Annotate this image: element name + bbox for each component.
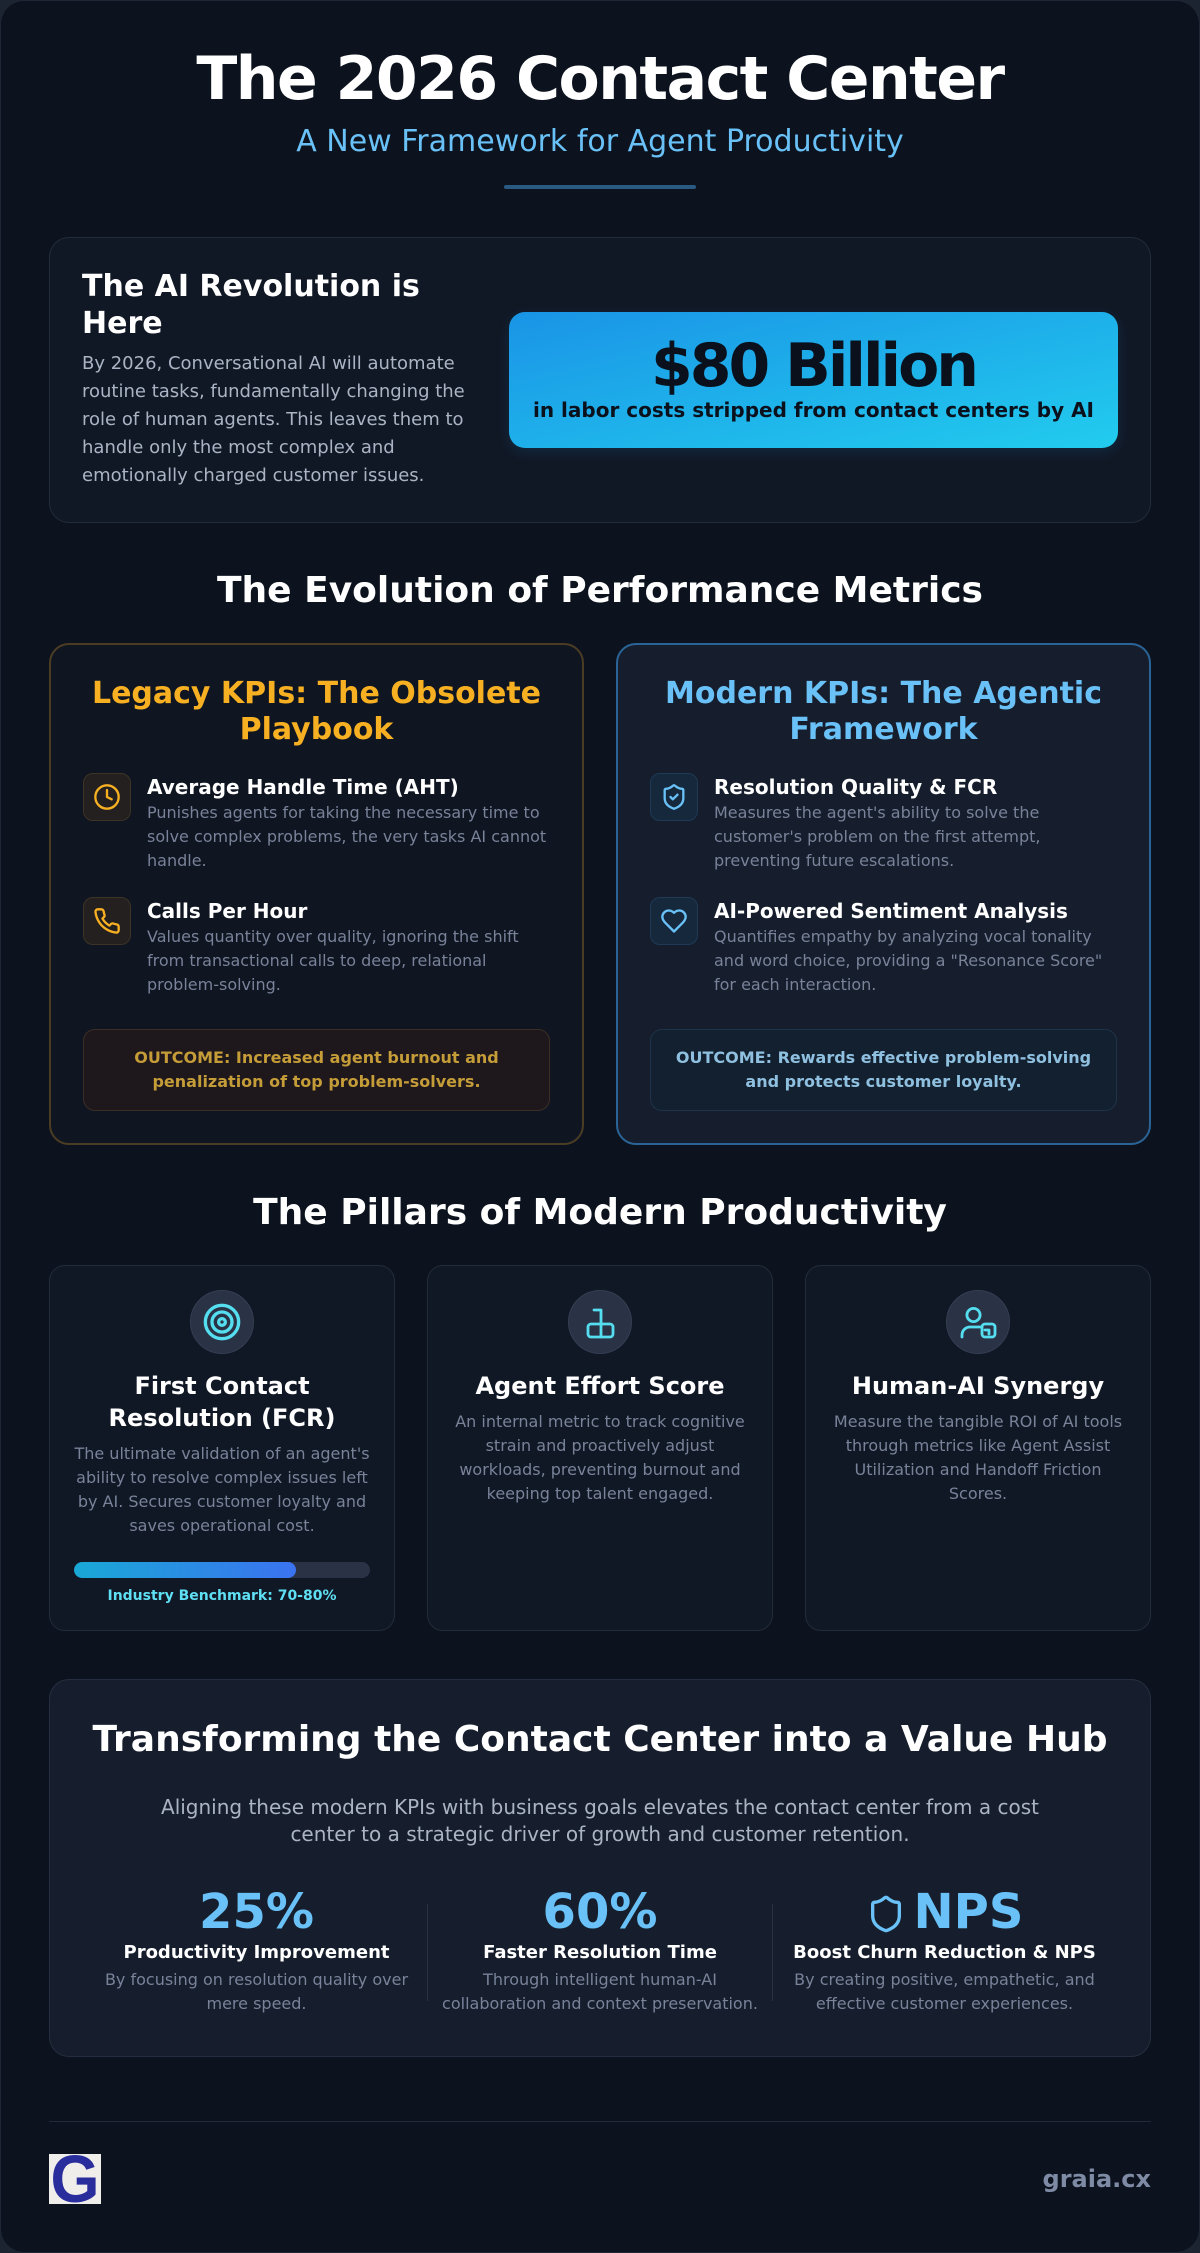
heading: modern KPIs: Modern KPIs: The Agentic bbox=[665, 676, 1102, 711]
panel: first contact resolution bbox=[49, 1265, 395, 1631]
item: sentiment analysis: Quantifies empathy by analyzing vocal tonality bbox=[714, 927, 1092, 946]
heading: legacy KPIs bbox=[92, 676, 541, 747]
heading: AI revolution: Here bbox=[82, 306, 163, 341]
panel: value hub bbox=[49, 1679, 1151, 2057]
panel: human AI synergy bbox=[805, 1265, 1151, 1631]
icon: target bbox=[190, 1290, 254, 1354]
item: resolution quality: preventing future escalations. bbox=[714, 851, 954, 870]
icon: shield bbox=[871, 1896, 901, 1932]
item: average handle time bbox=[147, 775, 546, 870]
stat: productivity: mere speed. bbox=[206, 1994, 306, 2013]
text block: synergy: through metrics like Agent Assist bbox=[846, 1436, 1110, 1455]
heading: legacy KPIs: Legacy KPIs: The Obsolete bbox=[92, 676, 541, 711]
text block: agent effort: workloads, preventing burnout and bbox=[459, 1460, 741, 1479]
item: calls per hour: Values quantity over quality, ignoring the shift bbox=[147, 927, 519, 946]
item: calls per hour: from transactional calls to deep, relational bbox=[147, 951, 486, 970]
benchmark label: Industry Benchmark: 70-80% bbox=[107, 1588, 337, 1604]
stat: resolution time: Faster Resolution Time bbox=[483, 1942, 717, 1963]
heading: modern KPIs: Framework bbox=[789, 712, 978, 747]
item: resolution quality: Measures the agent's ability to solve the bbox=[714, 803, 1039, 822]
item: sentiment analysis: and word choice, providing a "Resonance Score" bbox=[714, 951, 1102, 970]
callout: 80 billion stat bbox=[509, 312, 1118, 448]
text block: agent effort: strain and proactively adjust bbox=[486, 1436, 714, 1455]
stat: NPS: By creating positive, empathetic, and bbox=[794, 1970, 1095, 1989]
heading: legacy KPIs: Playbook bbox=[240, 712, 393, 747]
item: calls per hour: Calls Per Hour bbox=[147, 899, 307, 923]
item: resolution quality bbox=[714, 775, 1040, 870]
callout: modern outcome: and protects customer loyalty. bbox=[745, 1072, 1022, 1091]
text block: AI revolution body: routine tasks, fundamentally changing the bbox=[82, 381, 465, 402]
text block: AI revolution body bbox=[82, 353, 465, 486]
heading: FCR: Resolution (FCR) bbox=[109, 1404, 335, 1432]
item: calls per hour: problem-solving. bbox=[147, 975, 281, 994]
stat caption: in labor costs stripped from contact centers by AI bbox=[533, 398, 1094, 422]
stat: productivity: Productivity Improvement bbox=[124, 1942, 390, 1963]
icon: phone bbox=[83, 897, 131, 945]
text block: FCR: The ultimate validation of an agent's bbox=[74, 1444, 370, 1463]
stat: NPS: effective customer experiences. bbox=[816, 1994, 1073, 2013]
heading: AI revolution bbox=[82, 269, 420, 341]
title: The 2026 Contact Center bbox=[196, 44, 1004, 114]
bar chart: industry benchmark bbox=[74, 1562, 370, 1578]
item: average handle time: Punishes agents for taking the necessary time to bbox=[147, 803, 540, 822]
text block: FCR: ability to resolve complex issues left bbox=[76, 1468, 368, 1487]
text block: value hub intro: center to a strategic driver of growth and customer retention. bbox=[290, 1822, 910, 1846]
item: sentiment analysis: for each interaction. bbox=[714, 975, 876, 994]
panel: agent effort score bbox=[427, 1265, 773, 1631]
icon: shield check bbox=[650, 773, 698, 821]
text block: AI revolution body: emotionally charged customer issues. bbox=[82, 465, 424, 486]
heading: FCR: First Contact bbox=[134, 1372, 310, 1400]
heading: FCR bbox=[109, 1372, 335, 1432]
callout: modern outcome bbox=[650, 1029, 1117, 1111]
text block: synergy: Utilization and Handoff Friction bbox=[854, 1460, 1101, 1479]
header divider bbox=[504, 185, 696, 189]
item: average handle time: solve complex problems, the very tasks AI cannot bbox=[147, 827, 546, 846]
text block: FCR: by AI. Secures customer loyalty and bbox=[78, 1492, 366, 1511]
subtitle: A New Framework for Agent Productivity bbox=[296, 124, 904, 159]
panel: modern KPIs bbox=[616, 643, 1151, 1145]
text block: AI revolution body: handle only the most complex and bbox=[82, 437, 395, 458]
stat: NPS: NPS bbox=[914, 1884, 1023, 1940]
text block: agent effort bbox=[455, 1412, 745, 1503]
heading: AI revolution: The AI Revolution is bbox=[82, 269, 420, 304]
icon: robot bbox=[568, 1290, 632, 1354]
heading: evolution of metrics: The Evolution of Performance Metrics bbox=[217, 570, 983, 610]
text block: synergy: Scores. bbox=[949, 1484, 1007, 1503]
callout: legacy outcome: OUTCOME: Increased agent burnout and bbox=[134, 1048, 499, 1067]
icon: user with assistant bbox=[946, 1290, 1010, 1354]
stat: resolution time bbox=[442, 1884, 758, 2013]
footer brand: graia.cx bbox=[1043, 2165, 1151, 2193]
stat: resolution time: Through intelligent human-AI bbox=[483, 1970, 717, 1989]
text block: agent effort: keeping top talent engaged. bbox=[487, 1484, 713, 1503]
heading: synergy: Human-AI Synergy bbox=[852, 1372, 1104, 1400]
stat: NPS: Boost Churn Reduction & NPS bbox=[793, 1942, 1096, 1963]
stat: productivity: 25% bbox=[199, 1884, 314, 1940]
text block: synergy: Measure the tangible ROI of AI tools bbox=[834, 1412, 1122, 1431]
text block: FCR bbox=[74, 1444, 370, 1535]
text block: synergy bbox=[834, 1412, 1122, 1503]
item: resolution quality: Resolution Quality & FCR bbox=[714, 775, 997, 799]
stat value: $80 Billion bbox=[651, 331, 976, 401]
callout: legacy outcome bbox=[83, 1029, 550, 1111]
heading: value hub: Transforming the Contact Center into a Value Hub bbox=[92, 1718, 1108, 1760]
icon: clock bbox=[83, 773, 131, 821]
text block: AI revolution body: By 2026, Conversational AI will automate bbox=[82, 353, 455, 374]
panel: legacy KPIs bbox=[49, 643, 584, 1145]
text block: FCR: saves operational cost. bbox=[129, 1516, 315, 1535]
stat: productivity: By focusing on resolution quality over bbox=[105, 1970, 408, 1989]
callout: legacy outcome: penalization of top problem-solvers. bbox=[152, 1072, 481, 1091]
text block: value hub intro: Aligning these modern KPIs with business goals elevates the contact center from a cost bbox=[161, 1794, 1039, 1818]
stat: productivity bbox=[105, 1884, 408, 2013]
text block: agent effort: An internal metric to track cognitive bbox=[455, 1412, 745, 1431]
icon: heart bbox=[650, 897, 698, 945]
stat: resolution time: 60% bbox=[543, 1884, 657, 1940]
heading: pillars: The Pillars of Modern Productivity bbox=[253, 1192, 947, 1232]
item: average handle time: handle. bbox=[147, 851, 207, 870]
item: resolution quality: customer's problem on the first attempt, bbox=[714, 827, 1040, 846]
stat: NPS bbox=[793, 1884, 1096, 2013]
item: average handle time: Average Handle Time (AHT) bbox=[147, 775, 459, 799]
text block: AI revolution body: role of human agents. This leaves them to bbox=[82, 409, 464, 430]
item: sentiment analysis bbox=[714, 899, 1102, 994]
item: calls per hour bbox=[147, 899, 519, 994]
callout: modern outcome: OUTCOME: Rewards effective problem-solving bbox=[676, 1048, 1091, 1067]
logo: G mark: G bbox=[50, 2142, 100, 2217]
item: sentiment analysis: AI-Powered Sentiment Analysis bbox=[714, 899, 1068, 923]
heading: agent effort: Agent Effort Score bbox=[475, 1372, 725, 1400]
stat: resolution time: collaboration and context preservation. bbox=[442, 1994, 758, 2013]
panel: AI revolution bbox=[49, 237, 1151, 523]
heading: modern KPIs bbox=[665, 676, 1102, 747]
text block: value hub intro bbox=[161, 1794, 1039, 1846]
